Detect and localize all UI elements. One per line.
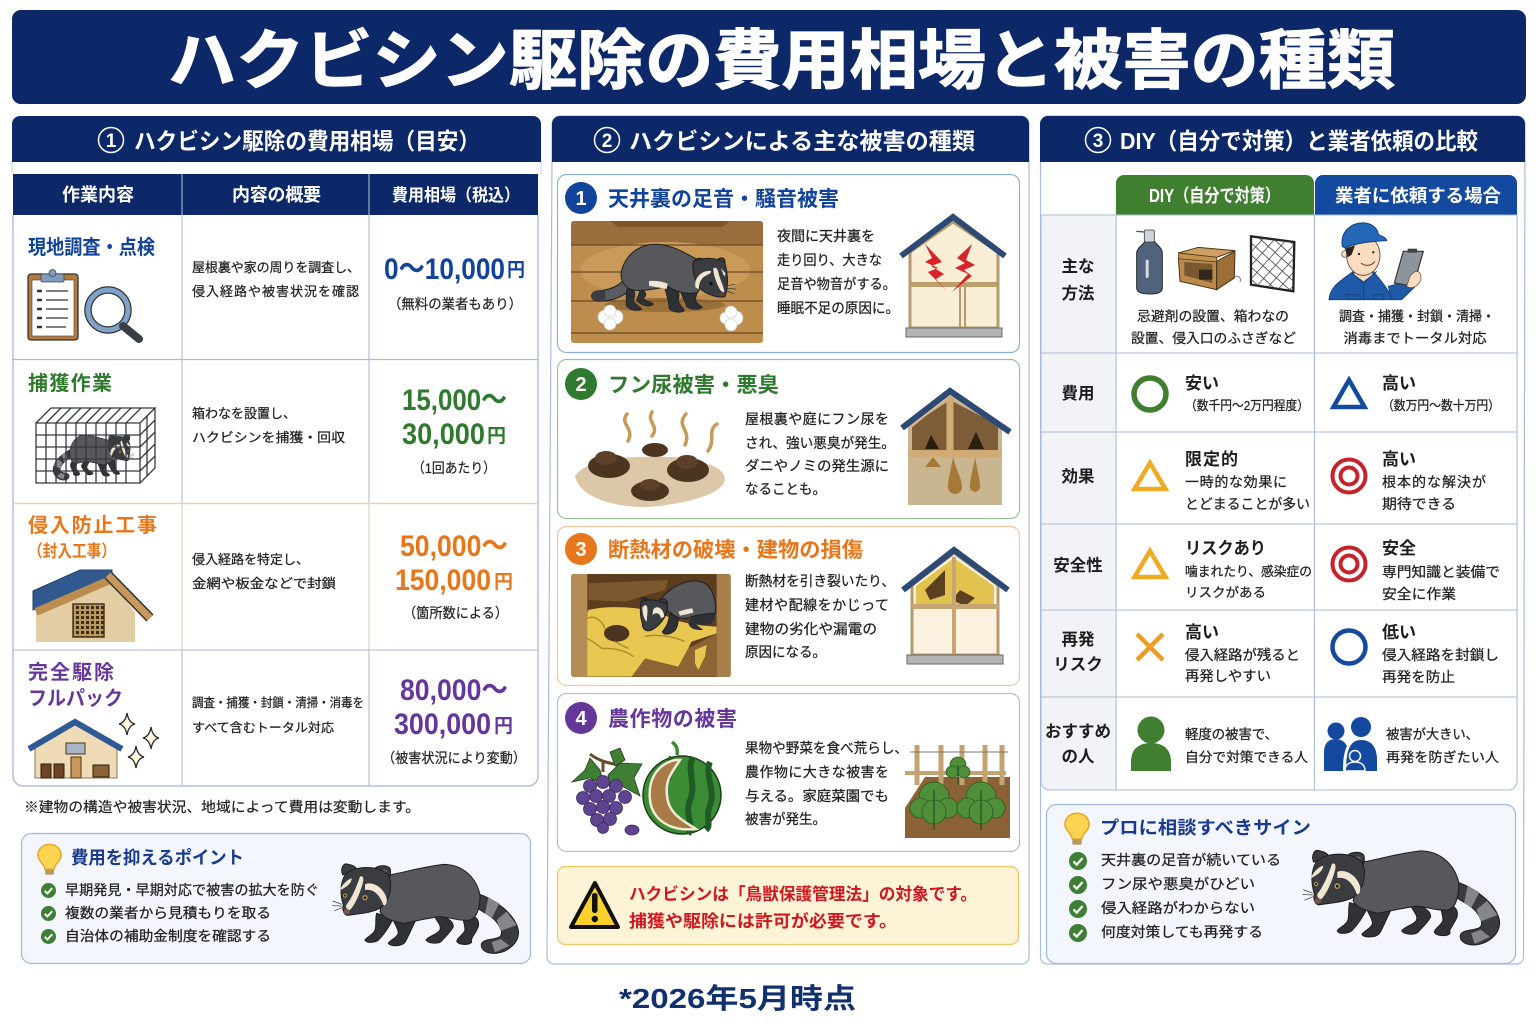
icon: light bulb bbox=[1065, 813, 1089, 845]
row: safety: 専門知識と装備で bbox=[1382, 564, 1500, 580]
row: full package: 300,000 bbox=[394, 708, 491, 741]
row: survey: （無料の業者もあり） bbox=[388, 296, 522, 312]
row: effect: 一時的な効果に bbox=[1185, 474, 1287, 490]
card: droppings damage: 屋根裏や庭にフン尿を bbox=[745, 411, 889, 427]
row: safety: 安全に作業 bbox=[1382, 586, 1456, 602]
heading: damage panel: ハクビシンによる主な被害の種類 bbox=[629, 128, 975, 154]
icon: house with sealed vent bbox=[33, 570, 150, 642]
row: capture: 15,000～ bbox=[402, 384, 507, 417]
table header row: 作業内容 bbox=[62, 185, 134, 205]
row: survey: 侵入経路や被害状況を確認 bbox=[192, 284, 359, 299]
heading: cost panel bbox=[12, 116, 541, 162]
row: full package: 円 bbox=[494, 716, 513, 737]
card: droppings damage: なることも。 bbox=[745, 481, 826, 497]
icon: vegetable garden bbox=[905, 745, 1010, 838]
row: survey bbox=[28, 236, 525, 340]
icon: warning sign bbox=[571, 883, 618, 927]
row: safety: 噛まれたり、感染症の bbox=[1185, 564, 1312, 579]
card: noise damage: 走り回り、大きな bbox=[777, 252, 882, 268]
row label column: 再発 bbox=[1062, 630, 1095, 649]
panel: damage types bbox=[547, 116, 1029, 964]
row label column bbox=[1041, 215, 1116, 790]
heading: damage panel bbox=[552, 116, 1029, 162]
row: full package: 完全駆除 bbox=[28, 661, 114, 684]
row: recommended for: 被害が大きい、 bbox=[1386, 727, 1479, 742]
row: survey: 現地調査・点検 bbox=[28, 236, 155, 259]
row: full package bbox=[28, 661, 526, 778]
row label column: おすすめ bbox=[1045, 722, 1111, 741]
column header: DIY: DIY（自分で対策） bbox=[1149, 186, 1280, 206]
row: survey: 円 bbox=[507, 260, 525, 281]
row: full package: 80,000～ bbox=[400, 674, 508, 707]
row: effect: 根本的な解決が bbox=[1382, 474, 1486, 490]
wire mesh fill bbox=[1251, 236, 1294, 291]
card: noise damage bbox=[558, 174, 1020, 352]
row label column: リスク bbox=[1053, 655, 1103, 674]
panel: cost table bbox=[12, 116, 541, 786]
row: sealing work bbox=[28, 513, 513, 642]
card: noise damage: 1 bbox=[575, 188, 587, 210]
callout: signs to consult a professional bbox=[1046, 804, 1516, 964]
row: effect: 高い bbox=[1382, 449, 1416, 469]
row: sealing work: 金網や板金などで封鎖 bbox=[192, 576, 336, 591]
card: insulation damage bbox=[558, 526, 1020, 686]
table header row: 費用相場（税込） bbox=[392, 186, 520, 205]
card: crop damage: 与える。家庭菜園でも bbox=[745, 788, 889, 804]
card: noise damage: 夜間に天井裏を bbox=[777, 228, 875, 244]
row: effect: とどまることが多い bbox=[1185, 496, 1310, 512]
icon: light bulb bbox=[38, 844, 61, 875]
callout: legal warning: 捕獲や駆除には許可が必要です。 bbox=[629, 911, 897, 931]
row: safety: リスクがある bbox=[1185, 585, 1266, 600]
row: full package: フルパック bbox=[28, 687, 123, 710]
card: crop damage: 被害が発生。 bbox=[745, 811, 826, 827]
card: droppings damage: ダニやノミの発生源に bbox=[745, 458, 889, 474]
row: effect bbox=[1134, 449, 1486, 512]
table header row bbox=[13, 174, 538, 215]
callout: legal warning: ハクビシンは「鳥獣保護管理法」の対象です。 bbox=[629, 884, 977, 904]
panel: DIY vs professional bbox=[1040, 116, 1525, 964]
illustration: droppings and odor bbox=[575, 412, 725, 507]
heading: cost panel: ハクビシン駆除の費用相場（目安） bbox=[134, 128, 480, 154]
card: crop damage: 果物や野菜を食べ荒らし、 bbox=[745, 740, 908, 756]
row: methods: 消毒までトータル対応 bbox=[1344, 331, 1487, 346]
row: recommended for: 軽度の被害で、 bbox=[1185, 727, 1278, 742]
row: sealing work: 侵入防止工事 bbox=[28, 513, 157, 537]
footnote: ※建物の構造や被害状況、地域によって費用は変動します。 bbox=[24, 799, 420, 815]
illustration: grapes and watermelon bbox=[572, 742, 721, 835]
card: insulation damage: 断熱材の破壊・建物の損傷 bbox=[608, 539, 863, 562]
row: cost: 安い bbox=[1185, 374, 1219, 393]
card: insulation damage: 建材や配線をかじって bbox=[745, 597, 889, 613]
row: sealing work: （封入工事） bbox=[28, 542, 116, 561]
callout: signs to consult a professional: 何度対策しても再発する bbox=[1101, 924, 1263, 940]
row: safety bbox=[1134, 539, 1500, 602]
callout: cost saving points: 早期発見・早期対応で被害の拡大を防ぐ bbox=[65, 882, 319, 898]
column header: professional bbox=[1315, 175, 1517, 215]
row: recurrence risk: 低い bbox=[1382, 623, 1416, 642]
card: insulation damage: 原因になる。 bbox=[745, 644, 826, 660]
card: crop damage: 4 bbox=[575, 708, 587, 730]
callout: signs to consult a professional: 天井裏の足音が続いている bbox=[1101, 852, 1281, 868]
row: survey: 屋根裏や家の周りを調査し、 bbox=[192, 260, 360, 275]
row: cost: 高い bbox=[1382, 373, 1416, 393]
icon: stained attic bbox=[902, 391, 1010, 505]
row: methods: 設置、侵入口のふさぎなど bbox=[1131, 330, 1297, 346]
row: capture: 捕獲作業 bbox=[28, 372, 112, 395]
card: crop damage: 農作物の被害 bbox=[608, 708, 737, 731]
row: recurrence risk bbox=[1137, 622, 1499, 685]
row label column: 費用 bbox=[1062, 384, 1094, 403]
callout: signs to consult a professional: プロに相談すべきサイン bbox=[1100, 818, 1311, 838]
row: sealing work: 150,000 bbox=[395, 564, 491, 597]
icon: single person bbox=[1131, 716, 1171, 771]
row: methods bbox=[1131, 223, 1495, 346]
row: recurrence risk: 侵入経路が残ると bbox=[1185, 647, 1300, 663]
row: recommended for: 自分で対策できる人 bbox=[1185, 749, 1309, 765]
row: capture: 箱わなを設置し、 bbox=[192, 406, 296, 421]
card: droppings damage: 2 bbox=[575, 374, 587, 396]
card: insulation damage: 3 bbox=[575, 539, 587, 561]
row: cost: （数万円～数十万円） bbox=[1382, 398, 1500, 413]
illustration: civet tearing insulation bbox=[571, 574, 731, 677]
callout: signs to consult a professional: フン尿や悪臭がひどい bbox=[1101, 876, 1255, 892]
row label column: 効果 bbox=[1062, 467, 1095, 486]
icon: cage trap bbox=[36, 408, 155, 483]
heading: comparison panel bbox=[1040, 116, 1525, 162]
heading: damage panel: 2 bbox=[602, 131, 612, 152]
icon: house with noise bolts bbox=[901, 217, 1005, 337]
heading: comparison panel: DIY（自分で対策）と業者依頼の比較 bbox=[1120, 128, 1478, 154]
row: recommended for: 再発を防ぎたい人 bbox=[1386, 750, 1500, 765]
row: effect: 限定的 bbox=[1185, 450, 1238, 469]
icon: civet bbox=[1302, 850, 1500, 945]
table header row: 内容の概要 bbox=[232, 185, 321, 205]
row: full package: （被害状況により変動） bbox=[382, 750, 526, 766]
illustration: civet in attic bbox=[571, 221, 763, 343]
card: droppings damage: され、強い悪臭が発生。 bbox=[745, 435, 895, 451]
column header: professional: 業者に依頼する場合 bbox=[1335, 186, 1501, 206]
icon: family bbox=[1324, 717, 1377, 771]
row: recurrence risk: 侵入経路を封鎖し bbox=[1382, 647, 1499, 663]
row: methods: 忌避剤の設置、箱わなの bbox=[1137, 309, 1289, 324]
callout: cost saving points: 自治体の補助金制度を確認する bbox=[65, 928, 271, 944]
card: crop damage bbox=[558, 694, 1020, 852]
row label column: 安全性 bbox=[1053, 555, 1103, 575]
column header: DIY bbox=[1116, 175, 1314, 215]
row: sealing work: 円 bbox=[494, 572, 513, 593]
heading: comparison panel: 3 bbox=[1093, 131, 1103, 152]
callout: cost saving points: 複数の業者から見積もりを取る bbox=[65, 905, 271, 921]
row: safety: 安全 bbox=[1382, 539, 1416, 558]
icon: house with broken insulation bbox=[903, 550, 1008, 664]
card: insulation damage: 断熱材を引き裂いたり、 bbox=[745, 573, 895, 589]
icon: clipboard and magnifier bbox=[28, 270, 139, 340]
row label column: 方法 bbox=[1062, 283, 1095, 303]
card: droppings damage bbox=[558, 360, 1020, 518]
row: cost bbox=[1134, 373, 1500, 413]
title banner: ハクビシン駆除の費用相場と被害の種類 bbox=[168, 24, 1395, 97]
row: effect: 期待できる bbox=[1382, 496, 1456, 512]
row: sealing work: 50,000～ bbox=[400, 530, 508, 563]
row: capture bbox=[28, 372, 507, 483]
card: droppings damage: フン尿被害・悪臭 bbox=[608, 374, 779, 397]
card: crop damage: 農作物に大きな被害を bbox=[745, 764, 889, 780]
table grid bbox=[13, 215, 538, 786]
heading: cost panel: 1 bbox=[106, 131, 117, 152]
row label column: 主な bbox=[1062, 257, 1094, 276]
title banner bbox=[12, 10, 1526, 104]
row: recurrence risk: 再発を防止 bbox=[1382, 669, 1455, 685]
callout: signs to consult a professional: 侵入経路がわからない bbox=[1101, 900, 1255, 916]
card: noise damage: 睡眠不足の原因に。 bbox=[777, 300, 899, 316]
icon: civet bbox=[332, 864, 518, 953]
row: capture: 30,000 bbox=[402, 418, 485, 451]
row: sealing work: 侵入経路を特定し、 bbox=[192, 552, 309, 567]
row: methods: 調査・捕獲・封鎖・清掃・ bbox=[1339, 308, 1495, 324]
row: full package: 調査・捕獲・封鎖・清掃・消毒を bbox=[192, 695, 364, 710]
icon: worker with clipboard bbox=[1329, 223, 1423, 300]
row: full package: すべて含むトータル対応 bbox=[192, 721, 335, 735]
callout: cost saving points: 費用を抑えるポイント bbox=[71, 847, 244, 868]
row: recommended for bbox=[1131, 716, 1500, 771]
row: recurrence risk: 高い bbox=[1185, 622, 1219, 642]
row: survey: 0～10,000 bbox=[384, 253, 505, 286]
row label column: の人 bbox=[1062, 748, 1095, 766]
row: capture: ハクビシンを捕獲・回収 bbox=[192, 430, 345, 445]
card: insulation damage: 建物の劣化や漏電の bbox=[745, 621, 877, 637]
card: noise damage: 足音や物音がする。 bbox=[777, 276, 896, 292]
row: capture: 円 bbox=[487, 426, 506, 447]
row: sealing work: （箇所数による） bbox=[403, 605, 508, 621]
icon: spray, box trap, wire mesh bbox=[1136, 230, 1294, 294]
row: cost: （数千円～2万円程度） bbox=[1185, 398, 1309, 413]
icon: clean house with sparkles bbox=[29, 713, 159, 778]
row: recurrence risk: 再発しやすい bbox=[1185, 668, 1271, 684]
callout: cost saving points bbox=[22, 834, 530, 964]
row: capture: （1回あたり） bbox=[412, 460, 496, 476]
row: safety: リスクあり bbox=[1185, 539, 1266, 558]
callout: legal warning bbox=[558, 866, 1018, 944]
footer date note: *2026年5月時点 bbox=[619, 983, 856, 1014]
card: noise damage: 天井裏の足音・騒音被害 bbox=[608, 188, 839, 211]
